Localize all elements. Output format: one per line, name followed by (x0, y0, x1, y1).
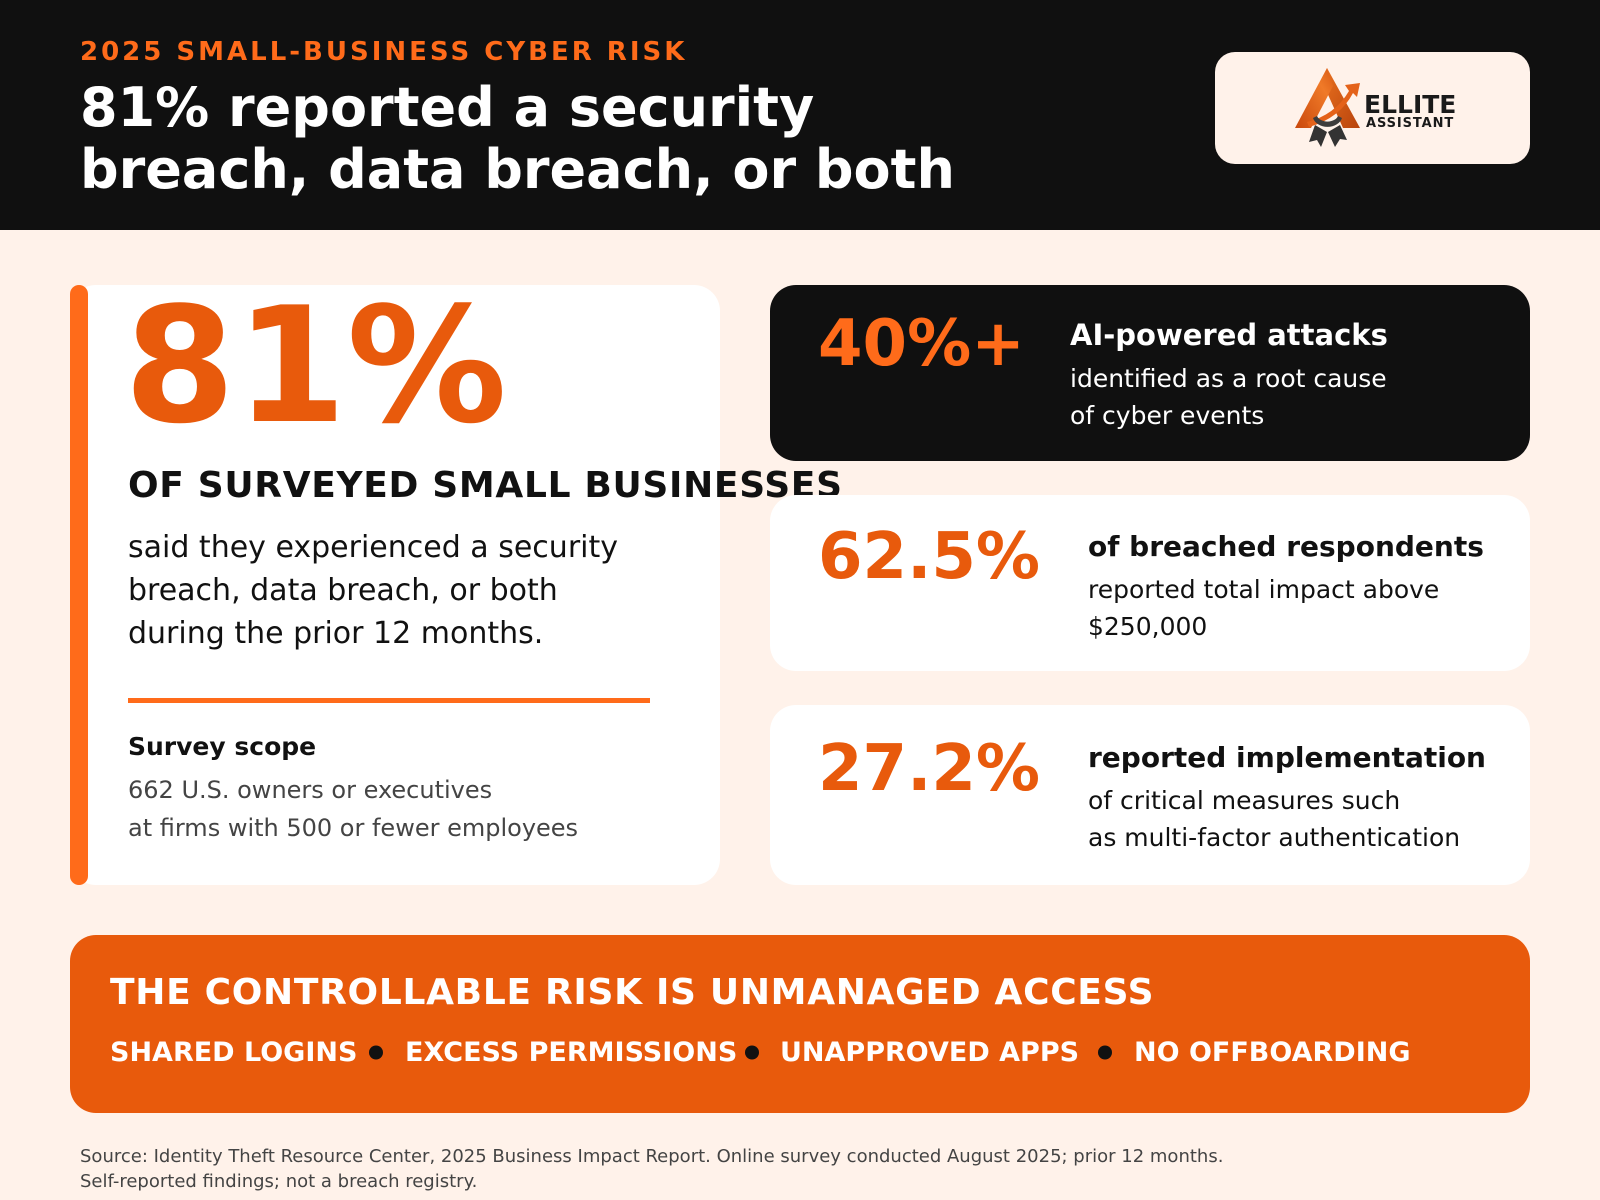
panel: AI-powered attacks (770, 285, 1530, 461)
stat text: reported total impact above (1088, 575, 1439, 604)
stat: 40%+ (818, 307, 1025, 381)
subheading: OF SURVEYED SMALL BUSINESSES (128, 465, 843, 506)
source note: Source: Identity Theft Resource Center, 2025 Business Impact Report. Online survey conducted August 2025; prior 12 months. (80, 1146, 1223, 1167)
stat: 27.2% (818, 732, 1040, 806)
banner heading: THE CONTROLLABLE RISK IS UNMANAGED ACCESS (110, 972, 1154, 1013)
stat text: $250,000 (1088, 612, 1207, 641)
risk list: EXCESS PERMISSIONS (405, 1037, 737, 1068)
stat text: of cyber events (1070, 401, 1264, 430)
title: 81% reported a security (80, 76, 814, 139)
divider rule (128, 698, 650, 703)
stat text: identified as a root cause (1070, 364, 1387, 393)
stat text (1088, 530, 1484, 641)
survey scope: at firms with 500 or fewer employees (128, 814, 578, 842)
risk list: SHARED LOGINS (110, 1037, 357, 1068)
stat text: reported implementation (1088, 741, 1486, 774)
survey scope (128, 732, 578, 842)
panel: breach cost (770, 495, 1530, 671)
eyebrow: 2025 SMALL-BUSINESS CYBER RISK (80, 37, 687, 67)
source note: Self-reported findings; not a breach registry. (80, 1171, 477, 1192)
icon: logo mark (1295, 68, 1360, 147)
panel: 81% headline card (70, 272, 843, 885)
description (128, 530, 618, 651)
logo wordmark: ASSISTANT (1366, 116, 1454, 131)
survey scope: 662 U.S. owners or executives (128, 776, 492, 804)
stat text: as multi-factor authentication (1088, 823, 1460, 852)
stat text (1088, 741, 1486, 852)
title (80, 76, 955, 201)
description: breach, data breach, or both (128, 573, 558, 608)
stat text: of critical measures such (1088, 786, 1400, 815)
description: said they experienced a security (128, 530, 618, 565)
risk list: UNAPPROVED APPS (780, 1037, 1079, 1068)
logo card (1215, 52, 1530, 164)
description: during the prior 12 months. (128, 616, 543, 651)
header band (0, 0, 1600, 230)
accent bar (70, 285, 88, 885)
big stat: 81% (124, 272, 507, 459)
source note (80, 1146, 1223, 1192)
panel: critical measures (770, 705, 1530, 885)
risk list: NO OFFBOARDING (1134, 1037, 1410, 1068)
survey scope: Survey scope (128, 732, 316, 761)
title: breach, data breach, or both (80, 138, 955, 201)
risk list (110, 1037, 1410, 1068)
stat text: AI-powered attacks (1070, 318, 1388, 352)
logo wordmark: ELLITE (1364, 90, 1456, 119)
stat: 62.5% (818, 520, 1040, 594)
stat text: of breached respondents (1088, 530, 1484, 563)
banner: unmanaged access (70, 935, 1530, 1113)
stat text (1070, 318, 1388, 430)
